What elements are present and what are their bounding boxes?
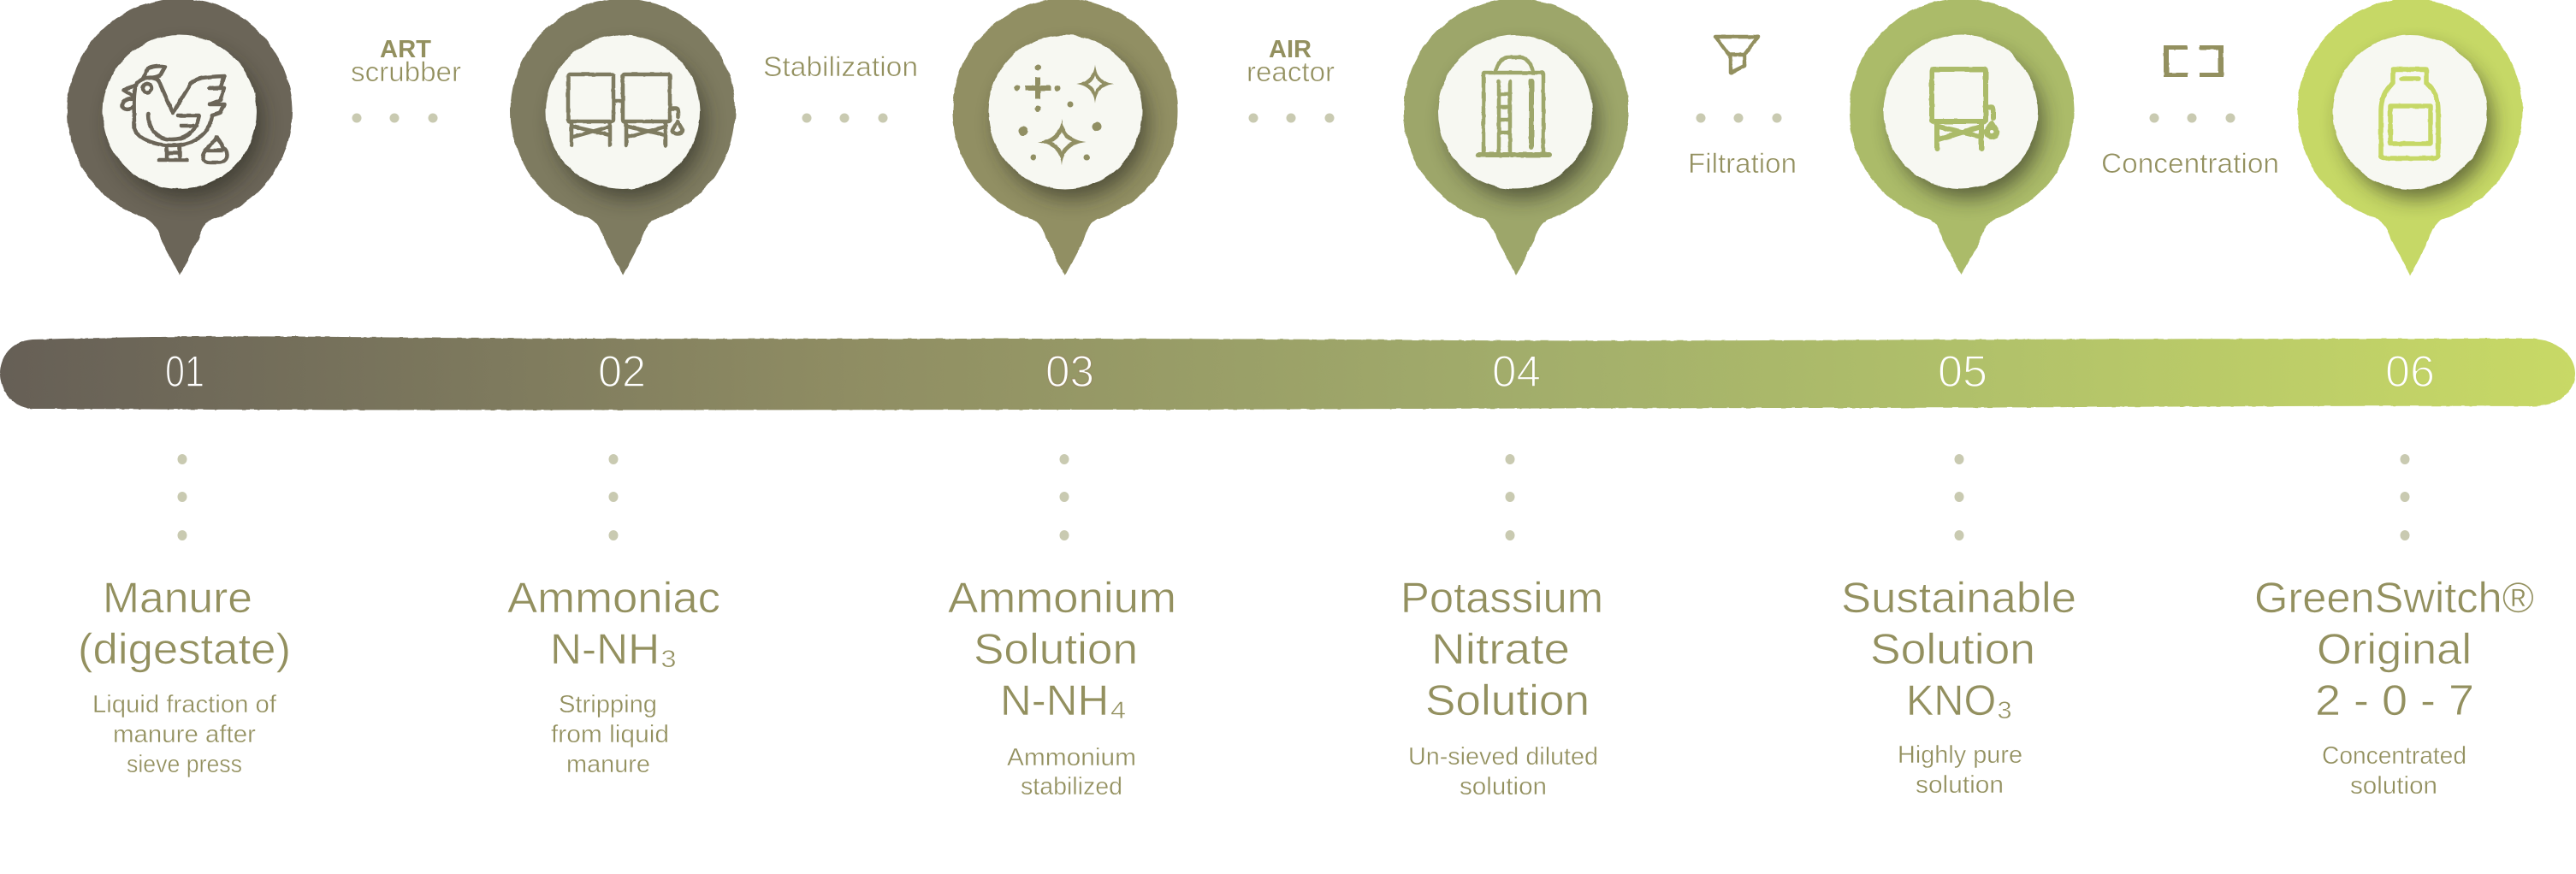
column 5: sustainable solution text: Sustainable	[1841, 574, 2076, 622]
connector 2: Stabilization	[763, 51, 918, 123]
icon: bottle	[2381, 69, 2438, 158]
column 2: ammoniac text	[507, 454, 720, 778]
connector 3: AIR reactor: AIR	[1269, 36, 1312, 63]
icon: chicken	[122, 66, 227, 162]
pin 5: sustainable solution	[1850, 0, 2075, 275]
column 4: potassium nitrate text: Potassium	[1401, 574, 1603, 622]
column 5: sustainable solution text: Highly pure	[1898, 741, 2022, 769]
column 5: sustainable solution text	[1841, 454, 2076, 799]
step numbers: 02	[598, 347, 646, 397]
icon: twin tanks	[568, 74, 683, 145]
pin 4: potassium nitrate	[1403, 0, 1628, 275]
column 6: GreenSwitch text: Original	[2317, 625, 2472, 673]
column 3: ammonium solution text: Ammonium	[1007, 744, 1136, 771]
column 3: ammonium solution text	[948, 454, 1176, 800]
column 5: sustainable solution text: Solution	[1870, 625, 2035, 673]
column 3: ammonium solution text: N-NH₄	[1000, 676, 1127, 724]
step numbers: 03	[1045, 347, 1094, 397]
connector 1: ART scrubber: ART	[380, 36, 431, 63]
connector 5: Concentration with bracket icon	[2101, 47, 2279, 179]
column 3: ammonium solution text: Solution	[974, 625, 1138, 673]
column 2: ammoniac text: N-NH₃	[550, 625, 678, 673]
icon: reactor silo	[1478, 57, 1549, 155]
column 2: ammoniac text: Ammoniac	[507, 574, 720, 622]
step numbers: 01	[165, 347, 204, 397]
step numbers: 04	[1492, 347, 1541, 397]
icon: sparkles	[1015, 64, 1114, 165]
column 1: manure text: Liquid fraction of	[92, 691, 277, 718]
connector 1: ART scrubber	[351, 36, 461, 123]
column 1: manure text	[78, 454, 291, 778]
column 5: sustainable solution text: KNO₃	[1906, 676, 2013, 724]
column 5: sustainable solution text: solution	[1916, 771, 2004, 799]
column 1: manure text: (digestate)	[78, 625, 291, 673]
connector 2: Stabilization: Stabilization	[763, 51, 918, 82]
column 2: ammoniac text: Stripping	[559, 691, 657, 718]
connector 1: ART scrubber: scrubber	[351, 56, 461, 87]
pin 1: manure	[67, 0, 292, 275]
column 2: ammoniac text: from liquid	[551, 721, 669, 748]
column 3: ammonium solution text: stabilized	[1021, 773, 1122, 800]
connector 4: Filtration with funnel icon: Filtration	[1688, 148, 1797, 179]
pin 2: ammoniac	[510, 0, 735, 275]
connector 3: AIR reactor: reactor	[1247, 56, 1335, 87]
column 4: potassium nitrate text	[1401, 454, 1603, 800]
connector 3: AIR reactor	[1247, 36, 1335, 123]
column 6: GreenSwitch text: Concentrated	[2322, 742, 2466, 770]
column 1: manure text: manure after	[113, 721, 256, 748]
column 6: GreenSwitch text: GreenSwitch®	[2254, 574, 2534, 622]
column 1: manure text: Manure	[103, 574, 252, 622]
column 6: GreenSwitch text: 2 - 0 - 7	[2315, 676, 2474, 724]
step numbers: 05	[1938, 347, 1987, 397]
column 4: potassium nitrate text: solution	[1460, 773, 1547, 800]
column 2: ammoniac text: manure	[566, 751, 650, 778]
timeline bar	[0, 336, 2575, 410]
icon: tank with drop	[1932, 69, 1998, 149]
column 4: potassium nitrate text: Solution	[1425, 676, 1590, 724]
column 6: GreenSwitch text	[2254, 454, 2534, 800]
pin 3: ammonium solution	[952, 0, 1177, 275]
column 4: potassium nitrate text: Nitrate	[1431, 625, 1570, 673]
column 6: GreenSwitch text: solution	[2350, 772, 2437, 800]
connector 4: Filtration with funnel icon	[1688, 37, 1797, 179]
step numbers	[165, 347, 2435, 397]
step numbers: 06	[2385, 347, 2435, 397]
pin 6: GreenSwitch	[2298, 0, 2522, 275]
column 3: ammonium solution text: Ammonium	[948, 574, 1176, 622]
connector 5: Concentration with bracket icon: Concentration	[2101, 148, 2279, 179]
column 1: manure text: sieve press	[127, 751, 242, 778]
column 4: potassium nitrate text: Un-sieved diluted	[1408, 743, 1598, 771]
